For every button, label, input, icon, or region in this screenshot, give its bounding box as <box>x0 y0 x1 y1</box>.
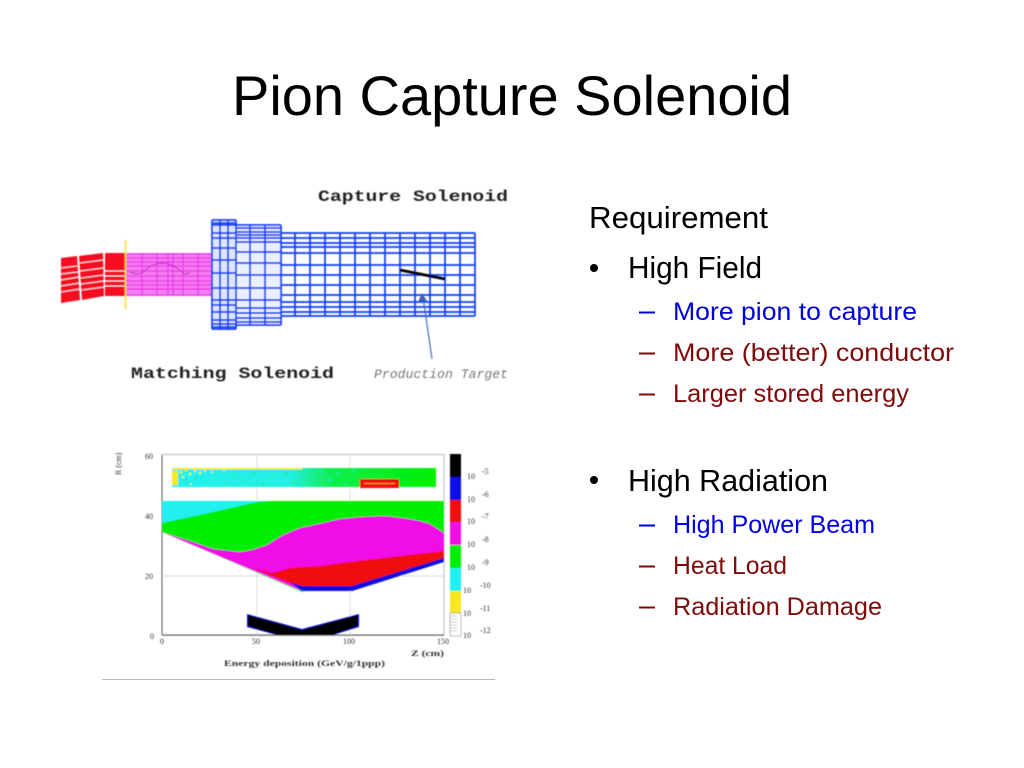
colour scale labels: -10 <box>480 581 491 590</box>
y axis labels <box>114 452 154 641</box>
bullet: high field: High Field <box>628 250 762 285</box>
colour scale labels: -9 <box>482 558 489 567</box>
colour scale labels: -12 <box>480 626 491 635</box>
colour scale labels: 10 <box>467 517 475 526</box>
black target shape <box>247 614 359 635</box>
y axis labels: 40 <box>145 512 153 521</box>
y axis labels: 20 <box>145 572 153 581</box>
label: production target: Production Target <box>374 367 508 382</box>
sub-item: larger stored energy: Larger stored energy <box>673 380 909 408</box>
yellow interface line <box>124 240 126 309</box>
colour scale labels: 10 <box>463 609 471 618</box>
cyan region <box>162 501 300 532</box>
x axis labels <box>160 637 449 668</box>
capture solenoid (blue coil grid) <box>212 220 475 329</box>
red hot spot <box>360 479 399 488</box>
colour scale labels: -7 <box>482 512 489 521</box>
chart baseline rule <box>102 678 495 680</box>
label: capture solenoid: Capture Solenoid <box>318 188 508 206</box>
colour scale labels: -11 <box>480 604 490 613</box>
x axis labels: Energy deposition (GeV/g/1ppp) <box>224 659 385 668</box>
label: matching solenoid: Matching Solenoid <box>131 365 334 383</box>
y axis labels: 0 <box>150 632 154 641</box>
x axis labels: 50 <box>252 637 260 646</box>
red region <box>247 551 444 588</box>
colour scale bar <box>450 454 461 636</box>
colour scale labels: 10 <box>463 586 471 595</box>
colour scale labels <box>463 467 491 640</box>
colour scale labels: 10 <box>467 563 475 572</box>
colour scale labels: -5 <box>482 467 489 476</box>
heading: requirement: Requirement <box>589 200 768 235</box>
colour scale labels: 10 <box>467 495 475 504</box>
energy deposition chart <box>114 452 491 668</box>
matching solenoid (magenta coils) <box>126 253 212 296</box>
colour scale labels: -6 <box>482 490 489 499</box>
x axis labels: 0 <box>160 637 164 646</box>
sub-item: radiation damage: Radiation Damage <box>673 593 882 621</box>
upper radiation band <box>172 468 436 487</box>
colour scale labels: 10 <box>467 540 475 549</box>
text block: requirement list <box>589 200 954 621</box>
solenoid diagram <box>61 188 508 383</box>
sub-item: more better conductor: More (better) conductor <box>673 339 954 367</box>
x axis labels: 150 <box>437 637 449 646</box>
colour scale labels: -8 <box>482 535 489 544</box>
arrow to production target <box>418 293 432 359</box>
y axis labels: R (cm) <box>114 452 123 475</box>
colour scale labels: 10 <box>467 472 475 481</box>
production target bar <box>400 270 445 279</box>
bullet: high radiation: High Radiation <box>628 463 828 498</box>
x axis labels: Z (cm) <box>411 649 444 658</box>
x axis labels: 100 <box>343 637 355 646</box>
green region <box>162 501 444 592</box>
title: Pion Capture Solenoid <box>232 64 792 127</box>
sub-item: heat load: Heat Load <box>673 552 787 580</box>
bend section (red coils) <box>61 253 126 303</box>
plot frame and grid <box>162 454 444 636</box>
colour scale labels: 10 <box>463 631 471 640</box>
y axis labels: 60 <box>145 452 153 461</box>
magenta region <box>162 516 444 591</box>
sub-item: more pion to capture: More pion to capture <box>673 298 917 326</box>
sub-item: high power beam: High Power Beam <box>673 511 875 539</box>
blue region <box>290 558 444 591</box>
